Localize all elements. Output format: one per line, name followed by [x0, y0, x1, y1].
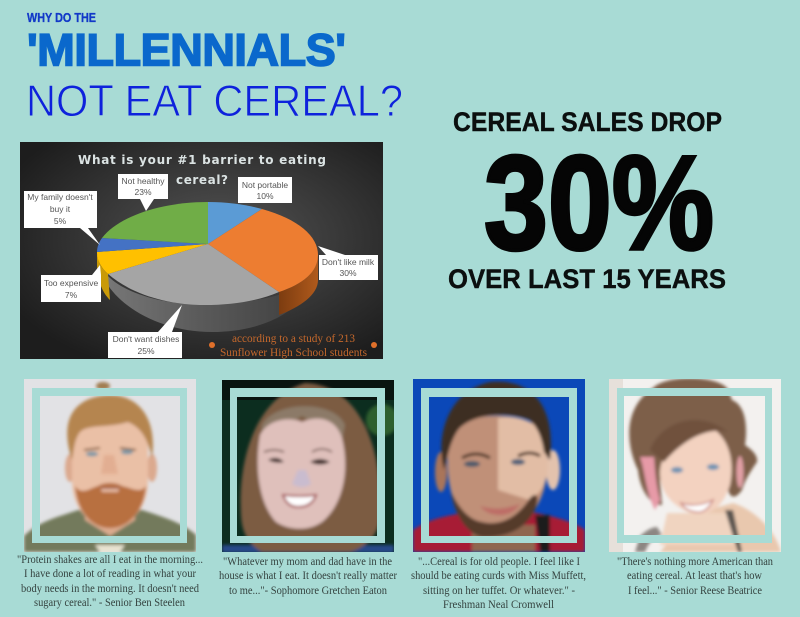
- label: don't like milk: Don't like milk: [322, 257, 375, 267]
- study note: [209, 333, 377, 359]
- chart title: [78, 153, 326, 187]
- label: don't want dishes: Don't want dishes: [113, 334, 179, 344]
- label: not portable: 10%: [256, 191, 274, 201]
- quote: Neal Cromwell: sitting on her tuffet. Or whatever." -: [423, 583, 575, 597]
- study note: Sunflower High School students: [220, 347, 368, 359]
- study note: according to a study of 213: [232, 333, 355, 345]
- quote: Ben Steelen: [17, 552, 203, 609]
- title block: [26, 11, 403, 126]
- label: don't want dishes: 25%: [137, 346, 155, 356]
- big number: 30%: [484, 129, 714, 278]
- label: too expensive: Too expensive: [44, 278, 98, 288]
- label: not healthy: Not healthy: [122, 176, 165, 186]
- quote: Neal Cromwell: [411, 554, 586, 611]
- quote: Gretchen Eaton: house is what I eat. It doesn't really matter: [219, 568, 397, 582]
- portrait: Reese Beatrice: [609, 378, 781, 552]
- panel: pie chart: [20, 142, 383, 359]
- quote: Ben Steelen: I have done a lot of reading in what your: [24, 566, 196, 580]
- quote: Gretchen Eaton: [219, 554, 397, 597]
- quote: Neal Cromwell: Freshman Neal Cromwell: [443, 597, 555, 611]
- label: family: buy it: [50, 204, 71, 214]
- quote: Neal Cromwell: should be eating curds with Miss Muffett,: [411, 568, 586, 582]
- chart title: What is your #1 barrier to eating: [78, 153, 326, 167]
- portrait: Ben Steelen: [24, 379, 196, 552]
- heading: millennials: 'MILLENNIALS': [27, 24, 346, 76]
- label: not portable: Not portable: [242, 180, 288, 190]
- label: not portable: [238, 177, 292, 203]
- portrait: Neal Cromwell: [413, 379, 585, 552]
- frame: Gretchen Eaton: [230, 388, 385, 543]
- quote: Neal Cromwell: "...Cereal is for old people. I feel like I: [418, 554, 580, 568]
- label: don't like milk: [318, 246, 378, 280]
- frame: Neal Cromwell: [421, 388, 577, 543]
- label: too expensive: [41, 265, 101, 302]
- quote: Reese Beatrice: eating cereal. At least that's how: [627, 568, 762, 582]
- label: don't want dishes: [108, 305, 182, 358]
- label: too expensive: 7%: [65, 290, 78, 300]
- label: family: 5%: [54, 216, 67, 226]
- label: family: My family doesn't: [27, 192, 93, 202]
- label: family: [24, 191, 100, 245]
- quote: Ben Steelen: "Protein shakes are all I eat in the morning...: [17, 552, 203, 566]
- quote: Ben Steelen: body needs in the morning. It doesn't need: [21, 581, 199, 595]
- frame: Ben Steelen: [32, 388, 187, 543]
- heading: not eat cereal: NOT EAT CEREAL?: [26, 77, 403, 126]
- kicker: why do the: WHY DO THE: [27, 11, 96, 25]
- label: don't like milk: 30%: [339, 268, 357, 278]
- quote: Gretchen Eaton: to me..."- Sophomore Gretchen Eaton: [229, 583, 387, 597]
- label: not healthy: 23%: [134, 187, 152, 197]
- stat heading: CEREAL SALES DROP: [453, 107, 722, 137]
- portrait: Gretchen Eaton: [222, 380, 398, 553]
- quote: Ben Steelen: sugary cereal." - Senior Ben Steelen: [34, 595, 185, 609]
- statistic block: [448, 107, 726, 294]
- quote: Reese Beatrice: "There's nothing more American than: [617, 554, 773, 568]
- stat subheading: OVER LAST 15 YEARS: [448, 264, 726, 294]
- chart title: cereal?: [176, 173, 228, 187]
- frame: Reese Beatrice: [617, 388, 772, 543]
- quote: Reese Beatrice: [617, 554, 773, 597]
- 3D pie: [97, 202, 318, 332]
- quote: Gretchen Eaton: "Whatever my mom and dad have in the: [223, 554, 392, 568]
- label: not healthy: [118, 174, 168, 211]
- quote: Reese Beatrice: I feel..." - Senior Reese Beatrice: [628, 583, 762, 597]
